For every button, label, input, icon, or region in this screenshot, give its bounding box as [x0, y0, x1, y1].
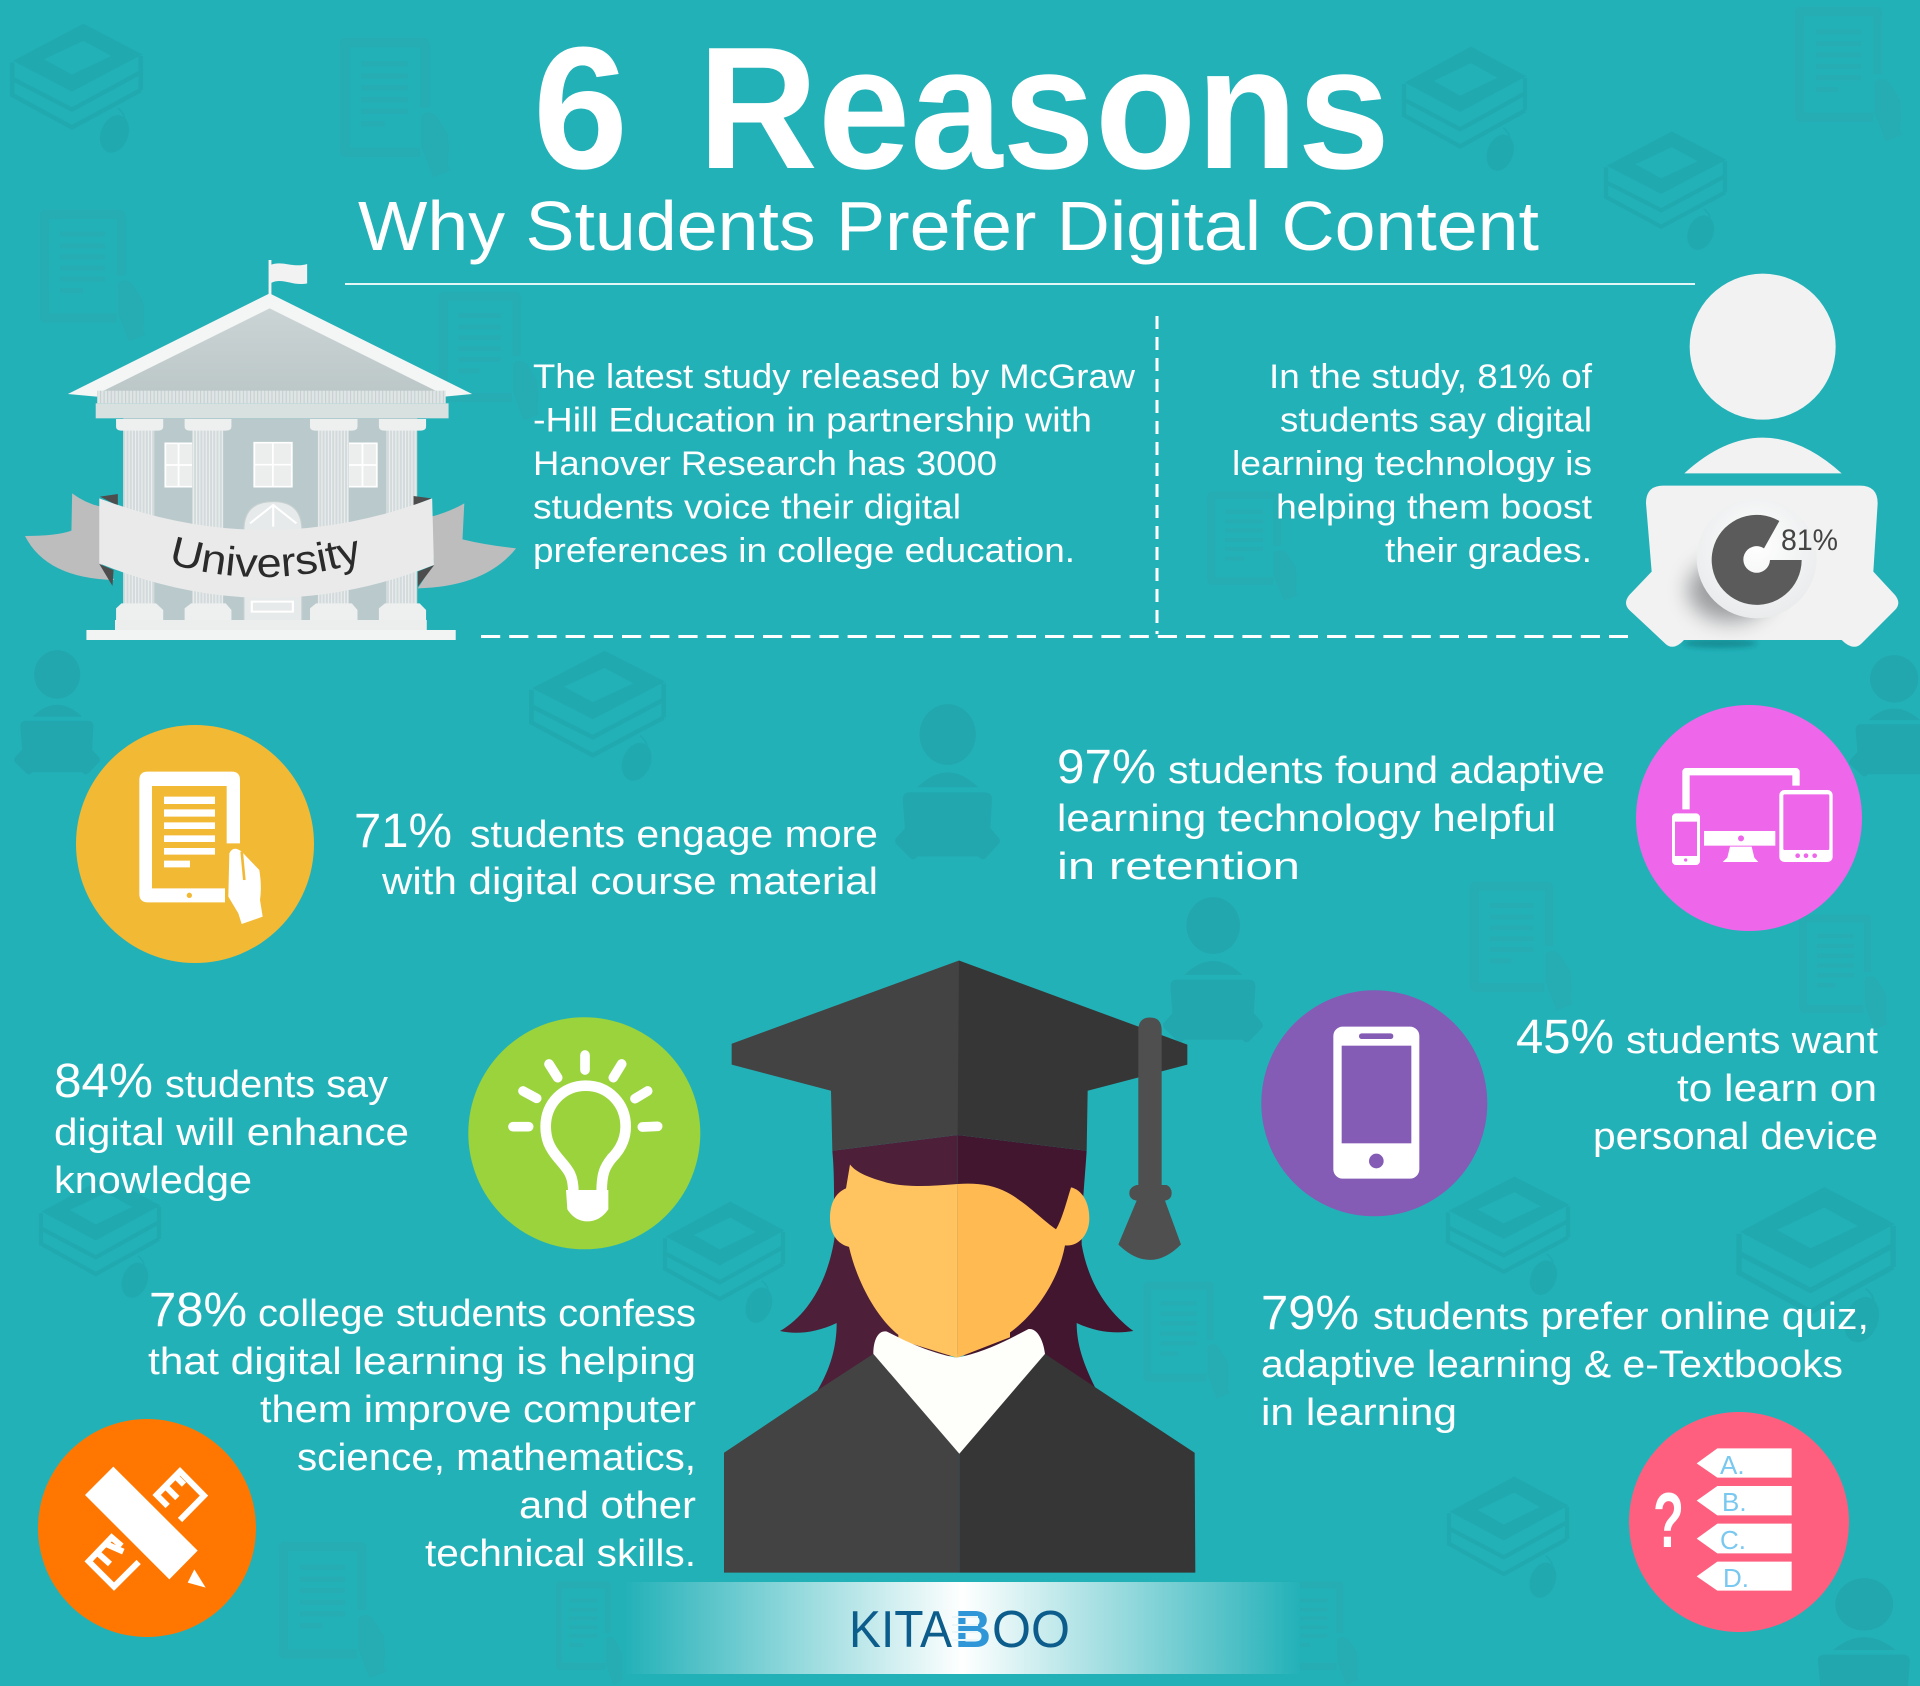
title: 6 [533, 10, 628, 205]
study paragraph: students say digital [1280, 402, 1592, 440]
stat: 71%: students engage more [470, 814, 878, 856]
stat: 97%: students found adaptive [1168, 750, 1605, 792]
icon: light bulb in green circle [468, 1017, 700, 1249]
study paragraph: their grades. [1385, 532, 1592, 570]
intro paragraph: students voice their digital [533, 488, 961, 526]
stat: 79%: adaptive learning & e-Textbooks [1261, 1344, 1843, 1386]
study paragraph [1232, 358, 1593, 570]
stat: 71%: 71% [354, 805, 452, 858]
study paragraph: In the study, 81% of [1269, 358, 1593, 396]
icon: pencil and ruler in orange circle [38, 1419, 256, 1637]
stat: 78%: that digital learning is helping [148, 1341, 696, 1383]
footer band with KITABOO logo: B [955, 1601, 991, 1659]
stat: 79%: 79% [1261, 1287, 1359, 1340]
stat: 78%: 78% [149, 1284, 247, 1337]
stat: 78%: technical skills. [425, 1533, 696, 1575]
stat: 79%: students prefer online quiz, [1373, 1296, 1869, 1338]
icon: quiz tags in pink circle [1629, 1412, 1849, 1632]
stat: 78% [38, 1284, 696, 1637]
intro paragraph: -Hill Education in partnership with [533, 402, 1092, 440]
stat: 78%: science, mathematics, [297, 1437, 696, 1479]
title: Reasons [698, 10, 1390, 205]
icon: person with laptop and 81% chart: 81% [1781, 524, 1838, 557]
icon: quiz tags in pink circle: C. [1720, 1525, 1746, 1555]
stat: 78%: college students confess [258, 1293, 696, 1335]
footer band with KITABOO logo: OO [992, 1601, 1070, 1659]
stat: 45% [1261, 990, 1878, 1216]
stat: 79%: in learning [1261, 1392, 1457, 1434]
intro paragraph [533, 358, 1135, 570]
icon: tablet in yellow circle [76, 725, 314, 963]
stat: 84%: students say [165, 1064, 388, 1106]
icon: devices in magenta circle [1636, 705, 1862, 931]
stat: 79% [1261, 1287, 1869, 1632]
stat: 45%: 45% [1516, 1011, 1614, 1064]
stat: 84%: knowledge [54, 1160, 252, 1202]
intro paragraph: Hanover Research has 3000 [533, 445, 997, 483]
icon: quiz tags in pink circle: D. [1723, 1563, 1749, 1593]
subtitle: Why Students Prefer Digital Content [358, 187, 1539, 265]
icon: person with laptop and 81% chart [1626, 274, 1898, 648]
icon: quiz tags in pink circle: B. [1722, 1487, 1747, 1517]
stat: 97% [1057, 705, 1862, 931]
study paragraph: helping them boost [1276, 488, 1593, 526]
stat: 97%: 97% [1057, 741, 1156, 794]
text: University: University [173, 536, 358, 578]
stat: 78%: and other [519, 1485, 696, 1527]
stat: 71% [76, 725, 878, 963]
stat: 78%: them improve computer [260, 1389, 696, 1431]
icon: quiz tags in pink circle: ? [1653, 1476, 1684, 1564]
stat: 97%: learning technology helpful [1057, 798, 1556, 840]
illustration: graduate student [724, 960, 1195, 1573]
stat: 45%: students want [1626, 1020, 1878, 1062]
intro paragraph: preferences in college education. [533, 532, 1075, 570]
footer band with KITABOO logo: KITA [849, 1601, 952, 1659]
icon: quiz tags in pink circle: A. [1720, 1450, 1745, 1480]
icon: smartphone in purple circle [1261, 990, 1487, 1216]
icon: university building [25, 260, 516, 640]
stat: 84% [54, 1017, 700, 1249]
stat: 84%: 84% [54, 1055, 153, 1108]
stat: 84%: digital will enhance [54, 1112, 409, 1154]
intro paragraph: The latest study released by McGraw [533, 358, 1135, 396]
study paragraph: learning technology is [1232, 445, 1592, 483]
stat: 71%: with digital course material [381, 861, 878, 903]
stat: 97%: in retention [1057, 846, 1300, 888]
stat: 45%: to learn on [1677, 1068, 1877, 1110]
footer band with KITABOO logo [625, 1582, 1300, 1674]
stat: 45%: personal device [1593, 1116, 1878, 1158]
